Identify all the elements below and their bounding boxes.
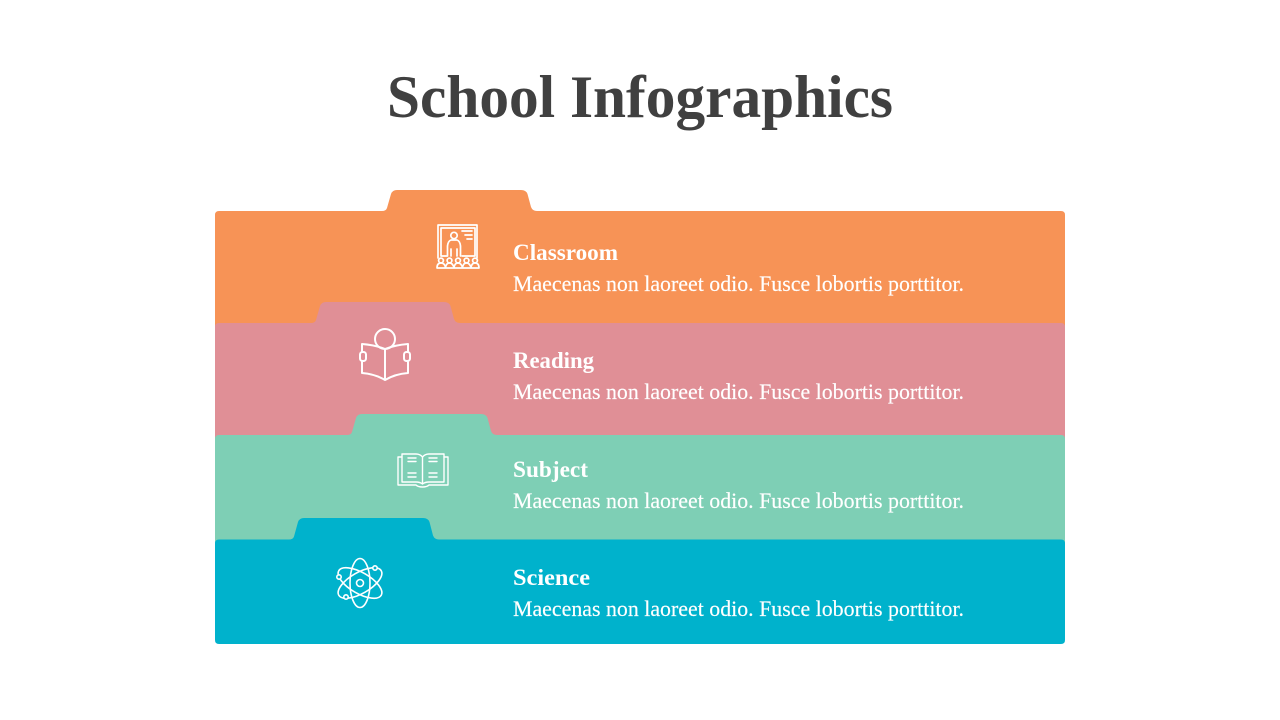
icon: open book — [398, 454, 448, 487]
icon: teacher in classroom — [437, 225, 479, 268]
panel: subject — [215, 414, 1065, 555]
title: School Infographics — [387, 64, 893, 130]
description: subject: Maecenas non laoreet odio. Fusce lobortis porttitor. — [513, 488, 964, 513]
tab shape: subject — [215, 414, 1065, 555]
description: reading: Maecenas non laoreet odio. Fusce lobortis porttitor. — [513, 379, 964, 404]
heading: reading: Reading — [513, 348, 594, 373]
heading: subject: Subject — [513, 457, 588, 482]
panel: science — [215, 518, 1065, 644]
description: science: Maecenas non laoreet odio. Fusce lobortis porttitor. — [513, 596, 964, 621]
panel: reading — [215, 302, 1065, 450]
heading: classroom: Classroom — [513, 240, 618, 265]
heading: science: Science — [513, 565, 590, 590]
tab shape: science — [215, 518, 1065, 644]
icon: person reading a book — [360, 329, 410, 380]
tab shape: classroom — [215, 190, 1065, 340]
icon: atom — [334, 558, 386, 608]
tab shape: reading — [215, 302, 1065, 450]
panel: classroom — [215, 190, 1065, 340]
description: classroom: Maecenas non laoreet odio. Fusce lobortis porttitor. — [513, 271, 964, 296]
